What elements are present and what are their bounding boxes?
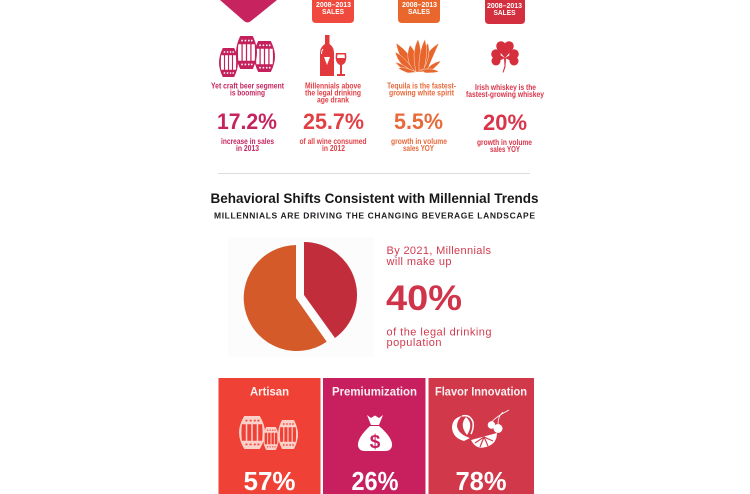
- icon: agave plant: [395, 39, 441, 73]
- text: craft beer: 17.2%: [217, 109, 277, 134]
- panel: pie chart: [228, 237, 374, 357]
- badge: wine sales: 2008–2013: [316, 2, 351, 9]
- heading: Behavioral Shifts Consistent with Millennial Trends: [210, 191, 538, 206]
- top shield: craft beer: [220, 0, 277, 22]
- icon: fruit: [452, 410, 509, 448]
- icon: beer barrels: [219, 36, 275, 77]
- text: craft beer: Yet craft beer segment: [211, 82, 284, 90]
- pie slice: others 60%: [244, 245, 327, 351]
- badge: tequila sales: SALES: [408, 9, 430, 16]
- badge: tequila sales: [398, 0, 440, 23]
- icon: shamrock: [491, 41, 519, 72]
- callout: 40 percent: population: [386, 337, 442, 349]
- text: craft beer: [211, 82, 284, 153]
- text: wine: the legal drinking: [305, 88, 361, 98]
- badge: tequila sales: 2008–2013: [402, 2, 437, 9]
- text: wine: of all wine consumed: [300, 137, 367, 146]
- callout: 40 percent: will make up: [386, 256, 452, 268]
- callout: 40 percent: By 2021, Millennials: [386, 245, 492, 257]
- panel: premiumization: [323, 378, 426, 494]
- text: whiskey: [466, 83, 544, 154]
- text: wine: age drank: [317, 96, 349, 104]
- panel: artisan: [218, 378, 320, 494]
- pie slice: millennials 40%: [304, 242, 357, 338]
- text: craft beer: increase in sales: [221, 137, 274, 146]
- panel: flavor innovation: Flavor Innovation: [435, 386, 527, 398]
- text: wine: [300, 82, 367, 153]
- text: tequila: sales YOY: [403, 144, 435, 153]
- callout: 40 percent: [386, 245, 492, 349]
- text: wine: Millennials above: [305, 82, 361, 90]
- text: whiskey: fastest-growing whiskey: [466, 90, 544, 99]
- badge: wine sales: [312, 0, 354, 23]
- subheading: MILLENNIALS ARE DRIVING THE CHANGING BEVERAGE LANDSCAPE: [214, 210, 535, 220]
- panel: artisan: Artisan: [250, 386, 289, 398]
- icon: money bag: $: [370, 432, 381, 453]
- text: craft beer: in 2013: [236, 144, 259, 153]
- badge: whiskey sales: SALES: [494, 10, 516, 17]
- callout: 40 percent: of the legal drinking: [386, 326, 492, 338]
- icon: wine bottle and glass: [320, 35, 346, 76]
- text: whiskey: 20%: [483, 110, 527, 135]
- text: whiskey: growth in volume: [477, 138, 532, 147]
- text: whiskey: sales YOY: [490, 145, 521, 154]
- text: whiskey: Irish whiskey is the: [475, 83, 536, 92]
- text: tequila: [387, 82, 456, 153]
- icon: barrels: [239, 416, 298, 450]
- badge: whiskey sales: 2008–2013: [487, 3, 522, 10]
- text: tequila: 5.5%: [394, 109, 443, 134]
- text: craft beer: is booming: [230, 88, 265, 98]
- callout: 40 percent: 40%: [386, 279, 462, 318]
- badge: whiskey sales: [485, 0, 525, 24]
- text: tequila: growth in volume: [391, 137, 447, 146]
- text: tequila: Tequila is the fastest-: [387, 82, 456, 90]
- text: tequila: growing white spirit: [389, 88, 454, 98]
- text: wine: in 2012: [322, 144, 345, 153]
- badge: wine sales: SALES: [322, 9, 344, 16]
- text: wine: 25.7%: [303, 109, 364, 134]
- panel: flavor innovation: [428, 378, 534, 494]
- panel: premiumization: Premiumization: [332, 386, 417, 398]
